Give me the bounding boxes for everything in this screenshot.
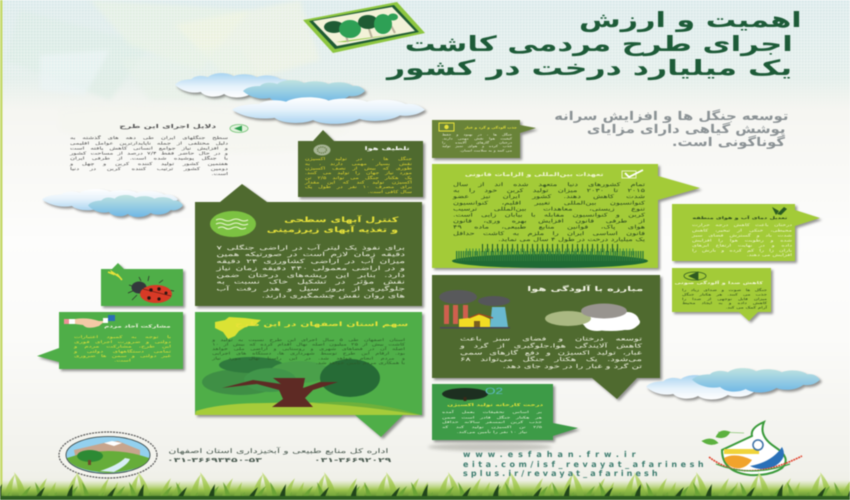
body text: درختان گازهای آلاینده را	[442, 141, 512, 144]
body text: میزان قابل توجهی از صدا را	[682, 297, 767, 301]
body text: هوای پاک، قوانین منابع طبیعی، ماده ۴۹	[453, 225, 645, 230]
body text: های روان نقش چشمگیری دارند.	[262, 293, 405, 299]
subtitle	[554, 108, 788, 150]
icon: handshake	[63, 314, 116, 328]
body text	[216, 244, 405, 300]
body text: درختان باعث کاهش درجه حرارت	[692, 223, 792, 227]
icon: water waves	[210, 210, 256, 238]
body text: شدت باد و گسترش فضای سبز	[692, 233, 792, 237]
panel: tree as oxygen factory	[432, 384, 579, 441]
body text	[691, 222, 792, 258]
heading: مشارکت آحاد مردم	[105, 324, 171, 329]
title: اجرای طرح مردمی کاشت	[405, 32, 793, 56]
body text: هفتمین کشور تولید کننده کربن و چهل و	[70, 162, 228, 166]
office name and phone numbers	[165, 447, 401, 471]
panel: fighting air pollution	[431, 274, 664, 402]
body text: دولتی و ضرورت اجرای فوری	[74, 340, 171, 344]
heading: جذب آلودگی و گرد و غبار	[465, 126, 517, 129]
icon: leaves	[772, 206, 788, 216]
body text: دارد. بنابر این ریشه‌های درختان ضمن	[216, 272, 405, 279]
panel: ladybug	[100, 262, 187, 310]
body text	[212, 338, 405, 366]
body text: نقش بسیار مهمی دارند ، به	[305, 162, 412, 166]
heading: reasons: دلایل اجرای این طرح	[119, 124, 216, 130]
body text: بر اساس تحقیقات بعمل آمده	[442, 411, 542, 414]
heading: تعهدات بین‌المللی و الزامات قانونی	[464, 172, 603, 178]
title: یک میلیارد درخت در کشور	[387, 56, 792, 80]
website links: splus.ir/revayat_afarinesh	[463, 469, 661, 478]
icon: arrow badge	[229, 124, 249, 134]
icon: factory with smoke	[438, 290, 510, 329]
body text: و در حال حاضر فقط ۷/۴ درصد از مساحت کشور	[70, 151, 228, 156]
body text: افزایش می دهند.	[747, 253, 792, 257]
body text: است.	[114, 359, 131, 363]
website links: www.esfahan.frw.ir	[463, 450, 641, 459]
body text: دلیل مختلفی از جمله ناپایدارترین عوامل اقلیمی	[70, 141, 228, 146]
body text: قانون اساسی ایران را ملزم به کاشت حداقل	[453, 231, 645, 236]
body text: و مردم انجام خواهد شد. در این راستا نهال مورد نیاز	[212, 356, 405, 361]
body text: جنگل ها صوت و صدای زیاد را	[682, 288, 767, 292]
icon: round emblem	[313, 144, 331, 156]
icon: check mark	[620, 168, 644, 180]
body text	[442, 132, 512, 153]
text block: reasons for the project	[69, 123, 249, 176]
body text: محیطی، خنکی از تبخیر، کاهش	[692, 228, 792, 232]
heading: درخت کارخانه تولید اکسیژن	[447, 403, 543, 407]
body text: ۲۰۱۵ تا ۲۰۳۰ میزان تولید کربن خود را به	[453, 188, 645, 194]
office name: اداره کل منابع طبیعی و آبخیزداری استان اصفهان	[168, 447, 388, 455]
website links: eita.com/isf_revayat_afarinesh	[463, 460, 707, 469]
body text: کاشت بیش از ۲۵ میلیون اصله نهال اقدام کرده که بیش از ۱۰	[212, 343, 405, 347]
website links	[463, 450, 705, 480]
body text: غیر دولتی و سمن ها ضروری	[74, 354, 171, 358]
body text: کاهش آلایندگی هوا،جلوگیری از گرد و	[460, 343, 642, 349]
icon: yellow badge	[438, 122, 456, 132]
body text: سال کافی است.	[368, 190, 412, 194]
body text: این طرح، مشارکت مردم و	[74, 345, 171, 349]
heading: و تغذیه آبهای زیرزمینی	[267, 225, 398, 234]
icon: pollution clouds	[544, 303, 641, 332]
phone number two: ۰۳۱-۳۶۶۹۲۰۲۹	[314, 457, 391, 464]
body text	[69, 134, 228, 176]
body text: باران زا را کم کرده و بارش را	[692, 248, 792, 252]
body text: استان اصفهان طی ۵ سال اجرای این طرح نسبت به تولید و	[212, 338, 405, 342]
body text: یک میلیارد درخت در طول ۴ سال می نماید.	[498, 237, 645, 242]
body text: دومین کشور ترتیب کننده کربن در دنیا	[70, 167, 228, 171]
body text: غبار، تولید اکسیژن و دفع گازهای سمی	[460, 350, 642, 356]
panel: environmental commitments	[431, 163, 702, 272]
body text: توسعه درختان و فضای سبز باعث	[460, 336, 642, 342]
icon: province map	[214, 316, 262, 340]
body text: مورد نیاز جهان را تولید می کنند.	[305, 171, 412, 175]
label: O2: O2	[485, 386, 503, 396]
body text: بود. ارقام این طرح توسط شهرداری ها، دستگاه های اجرایی	[212, 352, 405, 356]
panel: wind and noise reduction	[671, 267, 775, 324]
body text: جذب کربن اتمسفر سالانه حداقل	[442, 421, 542, 424]
panel: climate moderation	[671, 203, 822, 265]
body text: اکسیژن تولید کند که این مقدار	[305, 180, 412, 185]
subtitle: توسعه جنگل ها و افزایش سرانه	[554, 109, 788, 123]
heading: کنترل آبهای سطحی	[284, 215, 398, 224]
body text: اصله آن در فضاهای شهری و روستایی و اراضی ملی خواهد	[212, 347, 405, 351]
body text	[452, 182, 646, 243]
body text: تمام کشورهای دنیا متعهد شده اند از سال	[453, 182, 645, 188]
body text: یک هکتار جنگل می تواند ۲/۵ تن	[305, 176, 412, 180]
body text: کنوانسیون بین‌المللی تغییر اقلیم، کنوانسیون	[453, 200, 645, 206]
body text: شده و رطوبت هوا را افزایش	[692, 238, 792, 242]
panel: surface water control	[194, 184, 426, 310]
body text: با همکاری مردم تأمین خواهد شد.	[316, 361, 405, 365]
body text: برای نفوذ یک لیتر آب در اراضی جنگلی ۷	[216, 245, 405, 251]
body text: ۲/۵ تن اکسیژن تولید کند که	[442, 426, 542, 429]
body text: آرام کمک می کند.	[726, 306, 767, 309]
body text: تنوع زیستی، معاهدات بین‌المللی ترسیب	[453, 206, 645, 212]
body text: طوری که بیش از نصف اکسیژن	[305, 166, 412, 171]
body text: برای مصرف ۱۰ نفر در طول یک	[305, 185, 412, 189]
heading: کاهش صدا و آلودگی صوتی	[675, 281, 763, 285]
body text: با جنگل پوشیده شده است. از طرفی ایران	[70, 156, 228, 161]
body text: کیفیت هوا نقش مهمی دارند.	[442, 137, 512, 140]
illustration: grass strip	[452, 244, 648, 269]
heading: مبارزه با آلودگی هوا	[527, 285, 643, 293]
heading	[266, 214, 399, 234]
body text: جذب کرده و هوای تمیز تولید	[442, 145, 512, 148]
clouds: left group	[42, 193, 186, 221]
body text: تن گرد و غبار را در خود جای دهد.	[503, 364, 642, 370]
body text	[304, 156, 412, 194]
title: اهمیت و ارزش	[579, 8, 802, 32]
body text: است.	[211, 172, 228, 176]
body text: جذب می کنند. هر هکتار جنگل	[682, 293, 767, 296]
body text: می کنند و به سلامت انسان.	[459, 149, 512, 152]
icon: dark tree with O2	[432, 384, 553, 404]
panel: air purification	[297, 130, 427, 201]
icon: speaker	[683, 271, 707, 281]
body text: نقش مؤثر در تشکیل خاک نسبت به	[216, 279, 405, 285]
body text: از طرفی قانون افزایش بهره وری، قانون	[453, 219, 645, 224]
heading: سهم استان اصفهان در این طرح	[235, 321, 408, 328]
body text: و افزایش نیاز جوامع انسانی کاهش یافته است	[70, 146, 228, 151]
body text: می‌شود. یک هکتار جنگل می‌تواند ۶۸	[460, 357, 642, 363]
body text: جلوگیری از بروز سیل و هدر رفت آب	[216, 286, 405, 292]
icon: ladybug	[107, 270, 174, 304]
body text	[73, 334, 172, 363]
body text: کاهش داده و به ایجاد محیط	[682, 302, 767, 305]
body text	[442, 410, 542, 435]
illustration: large tree on hill	[194, 356, 420, 416]
logo: natural resources office seal	[0, 0, 170, 490]
phone number one: ۰۳۱-۳۶۶۹۳۴۵۰-۵۳	[167, 457, 262, 464]
body text: جنگل ها ، در بهبود و حفظ	[442, 133, 512, 136]
panel: top small olive note	[431, 119, 538, 162]
body text: شدت کاهش دهند. کشور ایران نیز عضو	[453, 194, 645, 200]
body text: میزان آب در اراضی کشاورزی ۲۴ دقیقه	[216, 259, 405, 265]
body text: کربن و کنوانسیون مقابله با بیابان زایی است.	[453, 213, 645, 218]
body text: دقیقه زمان لازم است در صورتیکه همین	[216, 252, 405, 258]
body text: نیاز ۱۰ نفر را تأمین می‌کند.	[457, 431, 527, 434]
heading: تلطیف هوا	[365, 146, 410, 152]
body text	[682, 288, 768, 310]
body text: و در اراضی معمولی ۴۴۰ دقیقه زمان نیاز	[216, 266, 405, 272]
body text: تمامی دستگاههای دولتی و	[74, 349, 171, 353]
heading: تعدیل دمای آب و هوای منطقه	[692, 216, 787, 220]
icon: framed forest picture	[302, 1, 426, 54]
subtitle: پوشش گیاهی دارای مزایای	[586, 122, 785, 136]
subtitle: گوناگونی است.	[672, 135, 785, 149]
title	[384, 8, 802, 81]
body text: هر هکتار جنگل قادر است ضمن	[442, 416, 542, 419]
body text: داده و در نهایت ارتفاع ابرهای	[692, 243, 792, 247]
body text: سطح جنگلهای ایران طی دهه های گذشته به	[70, 136, 228, 140]
panel: Isfahan province share	[194, 311, 426, 440]
panel: public participation	[37, 311, 187, 373]
body text: با توجه به کمبود اعتبارات	[74, 335, 171, 339]
body text	[460, 336, 642, 371]
body text: جنگل ها ، در تولید اکسیژن	[305, 157, 412, 161]
clouds: upper group	[176, 72, 428, 128]
